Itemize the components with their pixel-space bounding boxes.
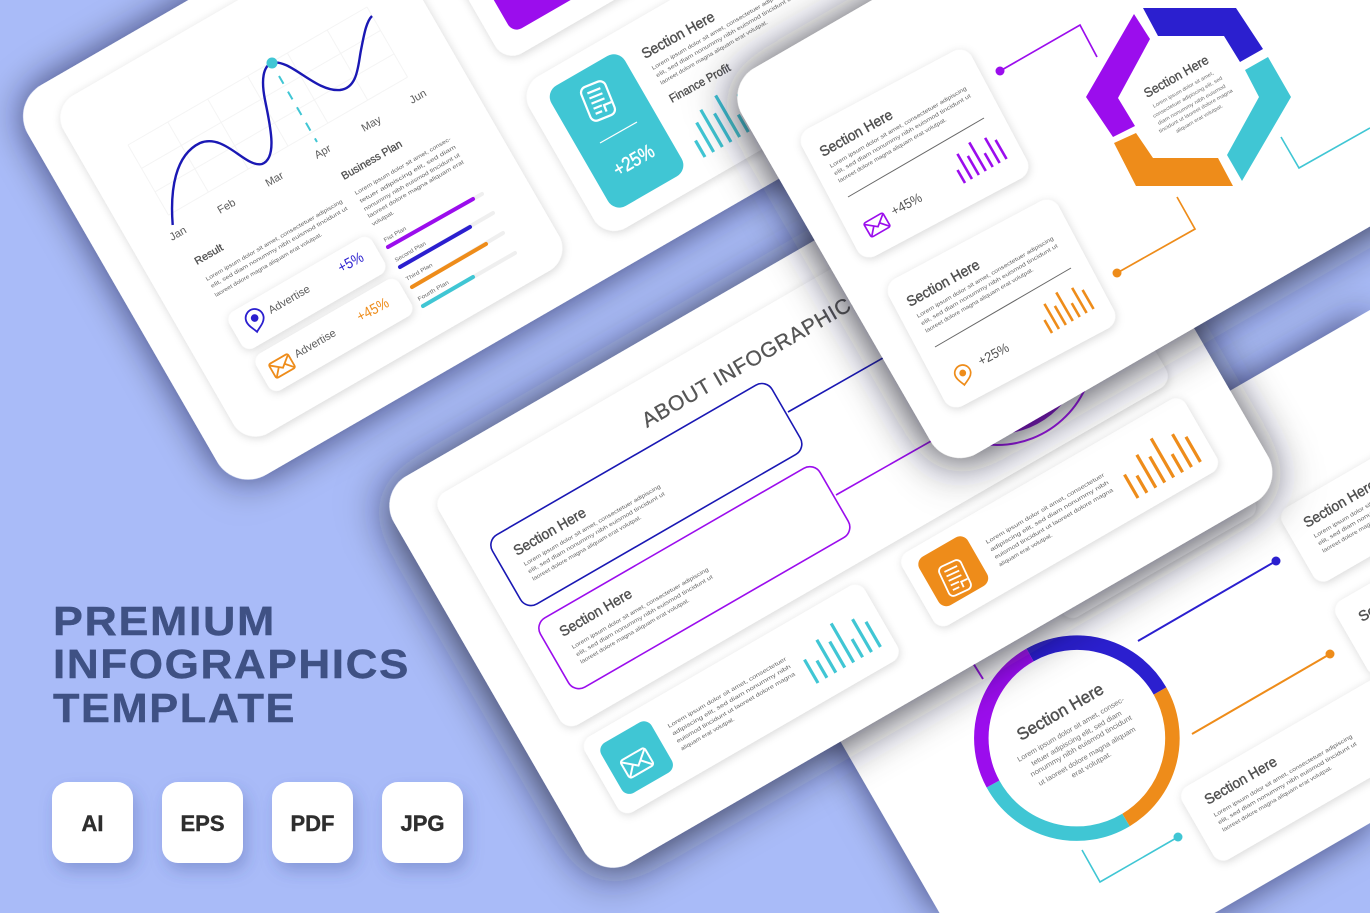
card: purple stat: Section Here	[817, 107, 896, 160]
connector: purple to circle	[836, 436, 940, 495]
chart: line chart	[128, 7, 429, 244]
text: donut center: erat volutpat.	[1070, 749, 1113, 780]
text: hexagon center: aliquam erat volutpat.	[1175, 103, 1224, 135]
card: orange stat	[883, 195, 1120, 412]
button: PDF	[272, 782, 353, 863]
bar chart: teal	[681, 85, 757, 157]
outlined box: purple section: Lorem ipsum dolor sit amet, consectetuer adipiscing	[571, 567, 710, 651]
icon: mail	[863, 213, 891, 237]
text: donut center: tetuer adipiscing elit, sed diam	[1030, 708, 1123, 768]
title: PREMIUM	[53, 598, 276, 644]
icon: pin	[954, 364, 972, 386]
chart: plan bars: Fist Plan	[383, 226, 408, 244]
card: orange stat: Section Here	[904, 257, 983, 310]
card: back card	[968, 338, 1260, 622]
text: business plan: Business Plan	[340, 138, 404, 183]
card: orange document: Lorem ipsum dolor sit amet, consectetuer	[985, 472, 1106, 546]
text: donut center: Section Here	[1014, 680, 1107, 744]
card: advertise blue: Advertise	[266, 283, 312, 317]
card: purple stat: Lorem ipsum dolor sit amet, consectetuer adipiscing	[829, 86, 968, 170]
card: advertise orange: Advertise	[292, 327, 338, 361]
connector: orange	[1112, 197, 1195, 278]
text: section	[639, 0, 799, 86]
card: top purple card	[430, 0, 765, 63]
connector: purple	[973, 663, 983, 679]
bar chart: orange	[1036, 280, 1094, 333]
card: bottom right section	[1177, 642, 1370, 865]
text: business plan: Lorem ipsum dolor sit amet, consec-	[354, 136, 452, 197]
card: purple stat: +45%	[888, 190, 925, 219]
button: AI	[52, 782, 133, 863]
button: JPG	[382, 782, 463, 863]
connector: blue to circle	[788, 354, 890, 412]
text: section: Lorem ipsum dolor sit amet, consectetuer adipiscing	[651, 0, 790, 72]
outlined box: purple section: elit, sed diam nonummy nibh euismod tincidunt ut	[575, 574, 715, 658]
button: AI: AI	[82, 811, 104, 836]
card: orange document: euismod tincidunt ut laoreet dolore magna	[994, 487, 1115, 561]
card: teal mail: adipiscing elit, sed diam nonummy nibh	[671, 664, 792, 737]
outlined box: purple section: Section Here	[557, 586, 635, 640]
card: purple stat: laoreet dolore magna aliquam erat volutpat.	[838, 117, 948, 184]
card: orange stat: +25%	[975, 340, 1012, 369]
teal stat tile: +25%	[610, 140, 659, 181]
outlined box: blue section: Lorem ipsum dolor sit amet, consectetuer adipiscing	[523, 484, 662, 568]
card: teal mail	[580, 581, 903, 817]
chart month labels: Jun	[408, 87, 429, 107]
heading: about infographics: ABOUT INFOGRAPHICS	[638, 286, 868, 432]
title	[53, 598, 410, 731]
card: orange document	[897, 394, 1222, 630]
chart month labels: Jan	[168, 224, 189, 244]
connector: orange	[1192, 650, 1334, 734]
heading: finance profit: Finance Profit	[667, 60, 733, 106]
text: business plan: nonummy nibh euismod tincidunt ut	[363, 152, 462, 213]
text: section: laoreet dolore magna aliquam erat volutpat.	[660, 20, 769, 86]
connector: teal	[1082, 832, 1182, 882]
text: result: Lorem ipsum dolor sit amet, consectetuer adipiscing	[205, 199, 344, 283]
outlined box: blue section: Section Here	[511, 505, 589, 559]
card: orange stat: Lorem ipsum dolor sit amet, consectetuer adipiscing	[916, 236, 1055, 320]
title: TEMPLATE	[53, 685, 296, 731]
card: advertise orange	[252, 276, 416, 394]
chart: plan bars: Fourth Plan	[417, 280, 450, 303]
text: hexagon center: tincidunt ut laoreet dolore magna	[1158, 88, 1234, 135]
title: INFOGRAPHICS	[53, 641, 410, 687]
text: business plan	[340, 136, 466, 228]
card: bottom right section: Section Here	[1202, 754, 1280, 808]
card: teal mail: euismod tincidunt ut laoreet dolore magna	[676, 671, 797, 745]
card: purple stat: elit, sed diam nonummy nibh euismod tincidunt ut	[833, 93, 973, 177]
text: donut center	[1014, 680, 1137, 788]
button: EPS	[162, 782, 243, 863]
panel: hexagon sheet on top	[725, 0, 1370, 470]
text: hexagon center	[1141, 52, 1234, 135]
text: hexagon center: Lorem ipsum dolor sit amet,	[1152, 71, 1215, 110]
card: advertise orange: +45%	[354, 295, 392, 326]
connector: blue	[1138, 556, 1280, 641]
chart month labels: Feb	[216, 197, 238, 217]
text: section: Section Here	[639, 9, 718, 62]
chart month labels: Mar	[264, 170, 286, 190]
bar chart: orange	[1116, 423, 1200, 498]
button: PDF: PDF	[290, 811, 334, 836]
text: result	[192, 199, 349, 299]
button: JPG: JPG	[400, 811, 445, 836]
panel: bottom right sheet	[786, 310, 1370, 913]
outlined box: blue section	[486, 379, 806, 610]
text: business plan: laoreet dolore magna aliquam erat	[367, 159, 466, 220]
outlined box: blue section: elit, sed diam nonummy nibh euismod tincidunt ut	[527, 491, 667, 575]
text: hexagon center: consectetuer adipiscing elit, sed	[1152, 76, 1224, 120]
bar chart: teal	[796, 608, 880, 683]
bar chart: purple	[948, 130, 1007, 183]
text: donut center: ut laoreet dolore magna aliquam	[1036, 724, 1137, 788]
text: hexagon center: Section Here	[1141, 52, 1211, 101]
button: EPS: EPS	[180, 811, 225, 836]
card: teal mail: aliquam erat volutpat.	[680, 716, 736, 752]
card: orange document: adipiscing elit, sed diam nonummy nibh	[989, 480, 1110, 553]
chart month labels: May	[360, 114, 384, 135]
chart month labels	[168, 87, 429, 244]
card: advertise blue	[225, 234, 389, 352]
text: hexagon center: diam nonummy nibh euismod	[1157, 84, 1227, 127]
card: bottom right section: Lorem ipsum dolor sit amet, consectetuer adipiscing	[1213, 734, 1354, 819]
outlined box: blue section: laoreet dolore magna aliquam erat volutpat.	[532, 515, 643, 582]
card: bottom right section: elit, sed diam nonummy nibh euismod tincidunt ut	[1217, 741, 1358, 826]
text: business plan: volutpat.	[371, 210, 396, 228]
chart: plan bars: Third Plan	[405, 263, 434, 283]
purple circle behind top sheet	[900, 251, 1094, 445]
card: teal mail: Lorem ipsum dolor sit amet, consectetuer	[667, 656, 788, 730]
panel: chart inner card	[51, 0, 572, 446]
connector: teal	[1281, 128, 1370, 168]
panel: top sheet with chart and finance cards	[10, 0, 1125, 493]
chart: plan bars	[383, 194, 515, 306]
text: donut center: nonummy nibh euismod tincidunt	[1028, 713, 1133, 779]
text: result: Result	[192, 242, 225, 268]
text: result: laoreet dolore magna aliquam erat volutpat.	[214, 232, 324, 299]
card: advertise blue: +5%	[335, 249, 367, 277]
text: donut center: Lorem ipsum dolor sit amet, consec-	[1016, 695, 1126, 764]
icon: document	[579, 79, 617, 123]
icon: mail	[268, 354, 296, 378]
connector: purple	[996, 25, 1097, 76]
icon: pin	[244, 308, 266, 333]
outlined box: purple section: laoreet dolore magna aliquam erat volutpat.	[580, 598, 691, 665]
card: purple stat	[796, 45, 1033, 262]
chart: plan bars: Second Plan	[394, 241, 427, 264]
card: top right section	[1277, 403, 1370, 586]
card: orange stat: elit, sed diam nonummy nibh euismod tincidunt ut	[920, 243, 1060, 327]
card: bottom right section: laoreet dolore magna aliquam erat volutpat.	[1222, 765, 1334, 833]
text: business plan: tetuer adipiscing elit, sed diam	[359, 144, 458, 205]
chart: donut ring	[981, 643, 1172, 834]
card: middle right section	[1331, 546, 1370, 679]
chart: hexagon ring	[1086, 8, 1291, 186]
text: result: elit, sed diam nonummy nibh euismod tincidunt ut	[210, 206, 349, 290]
outlined box: purple section	[534, 462, 854, 693]
card: orange stat: laoreet dolore magna aliquam erat volutpat.	[924, 267, 1035, 334]
icon: mail	[620, 747, 654, 779]
icon: document	[937, 558, 973, 598]
card: finance profit	[518, 0, 1125, 240]
teal stat tile	[545, 50, 688, 212]
text: section: elit, sed diam nonummy nibh euismod tincidunt ut	[655, 0, 795, 79]
card: orange document: aliquam erat volutpat.	[998, 532, 1054, 568]
panel: about infographics sheet	[377, 98, 1285, 880]
chart month labels: Apr	[312, 142, 334, 162]
